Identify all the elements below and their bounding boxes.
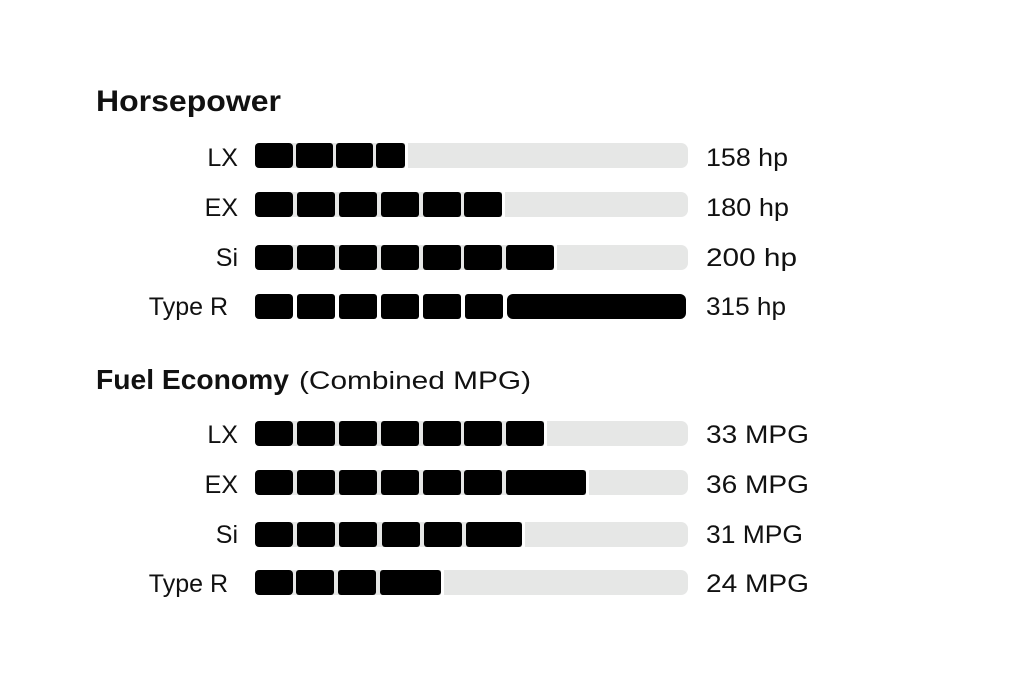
- row: LX mpg: 33 MPG: [706, 421, 809, 449]
- heading: Horsepower: Horsepower: [96, 85, 281, 118]
- row: EX horsepower: EX: [205, 194, 238, 222]
- row: LX mpg: LX: [207, 421, 238, 449]
- row: Si horsepower: Si: [216, 244, 238, 272]
- panel: fuel economy bars: [149, 421, 809, 598]
- row: EX horsepower: [205, 192, 789, 222]
- heading: Fuel Economy: [96, 364, 531, 395]
- row: Si horsepower: [216, 244, 797, 272]
- row: Type R mpg: 24 MPG: [706, 570, 809, 598]
- heading: Fuel Economy: (Combined MPG): [299, 367, 531, 395]
- row: LX horsepower: 158 hp: [706, 144, 788, 172]
- row: EX horsepower: 180 hp: [706, 194, 789, 222]
- row: Type R horsepower: [149, 293, 786, 321]
- row: Type R mpg: [149, 570, 809, 598]
- row: Si mpg: 31 MPG: [706, 521, 803, 549]
- row: LX horsepower: [207, 143, 788, 172]
- row: Si horsepower: 200 hp: [706, 244, 797, 272]
- row: Si mpg: Si: [216, 521, 238, 549]
- panel: horsepower bars: [149, 143, 797, 321]
- heading: Fuel Economy: Fuel Economy: [96, 364, 289, 395]
- row: EX mpg: 36 MPG: [706, 471, 809, 499]
- row: Type R horsepower: 315 hp: [706, 293, 786, 321]
- row: LX horsepower: LX: [207, 144, 238, 172]
- row: Type R horsepower: Type R: [149, 293, 228, 321]
- row: EX mpg: EX: [205, 471, 238, 499]
- row: EX mpg: [205, 470, 809, 499]
- row: Type R mpg: Type R: [149, 570, 228, 598]
- row: LX mpg: [207, 421, 809, 449]
- row: Si mpg: [216, 521, 803, 549]
